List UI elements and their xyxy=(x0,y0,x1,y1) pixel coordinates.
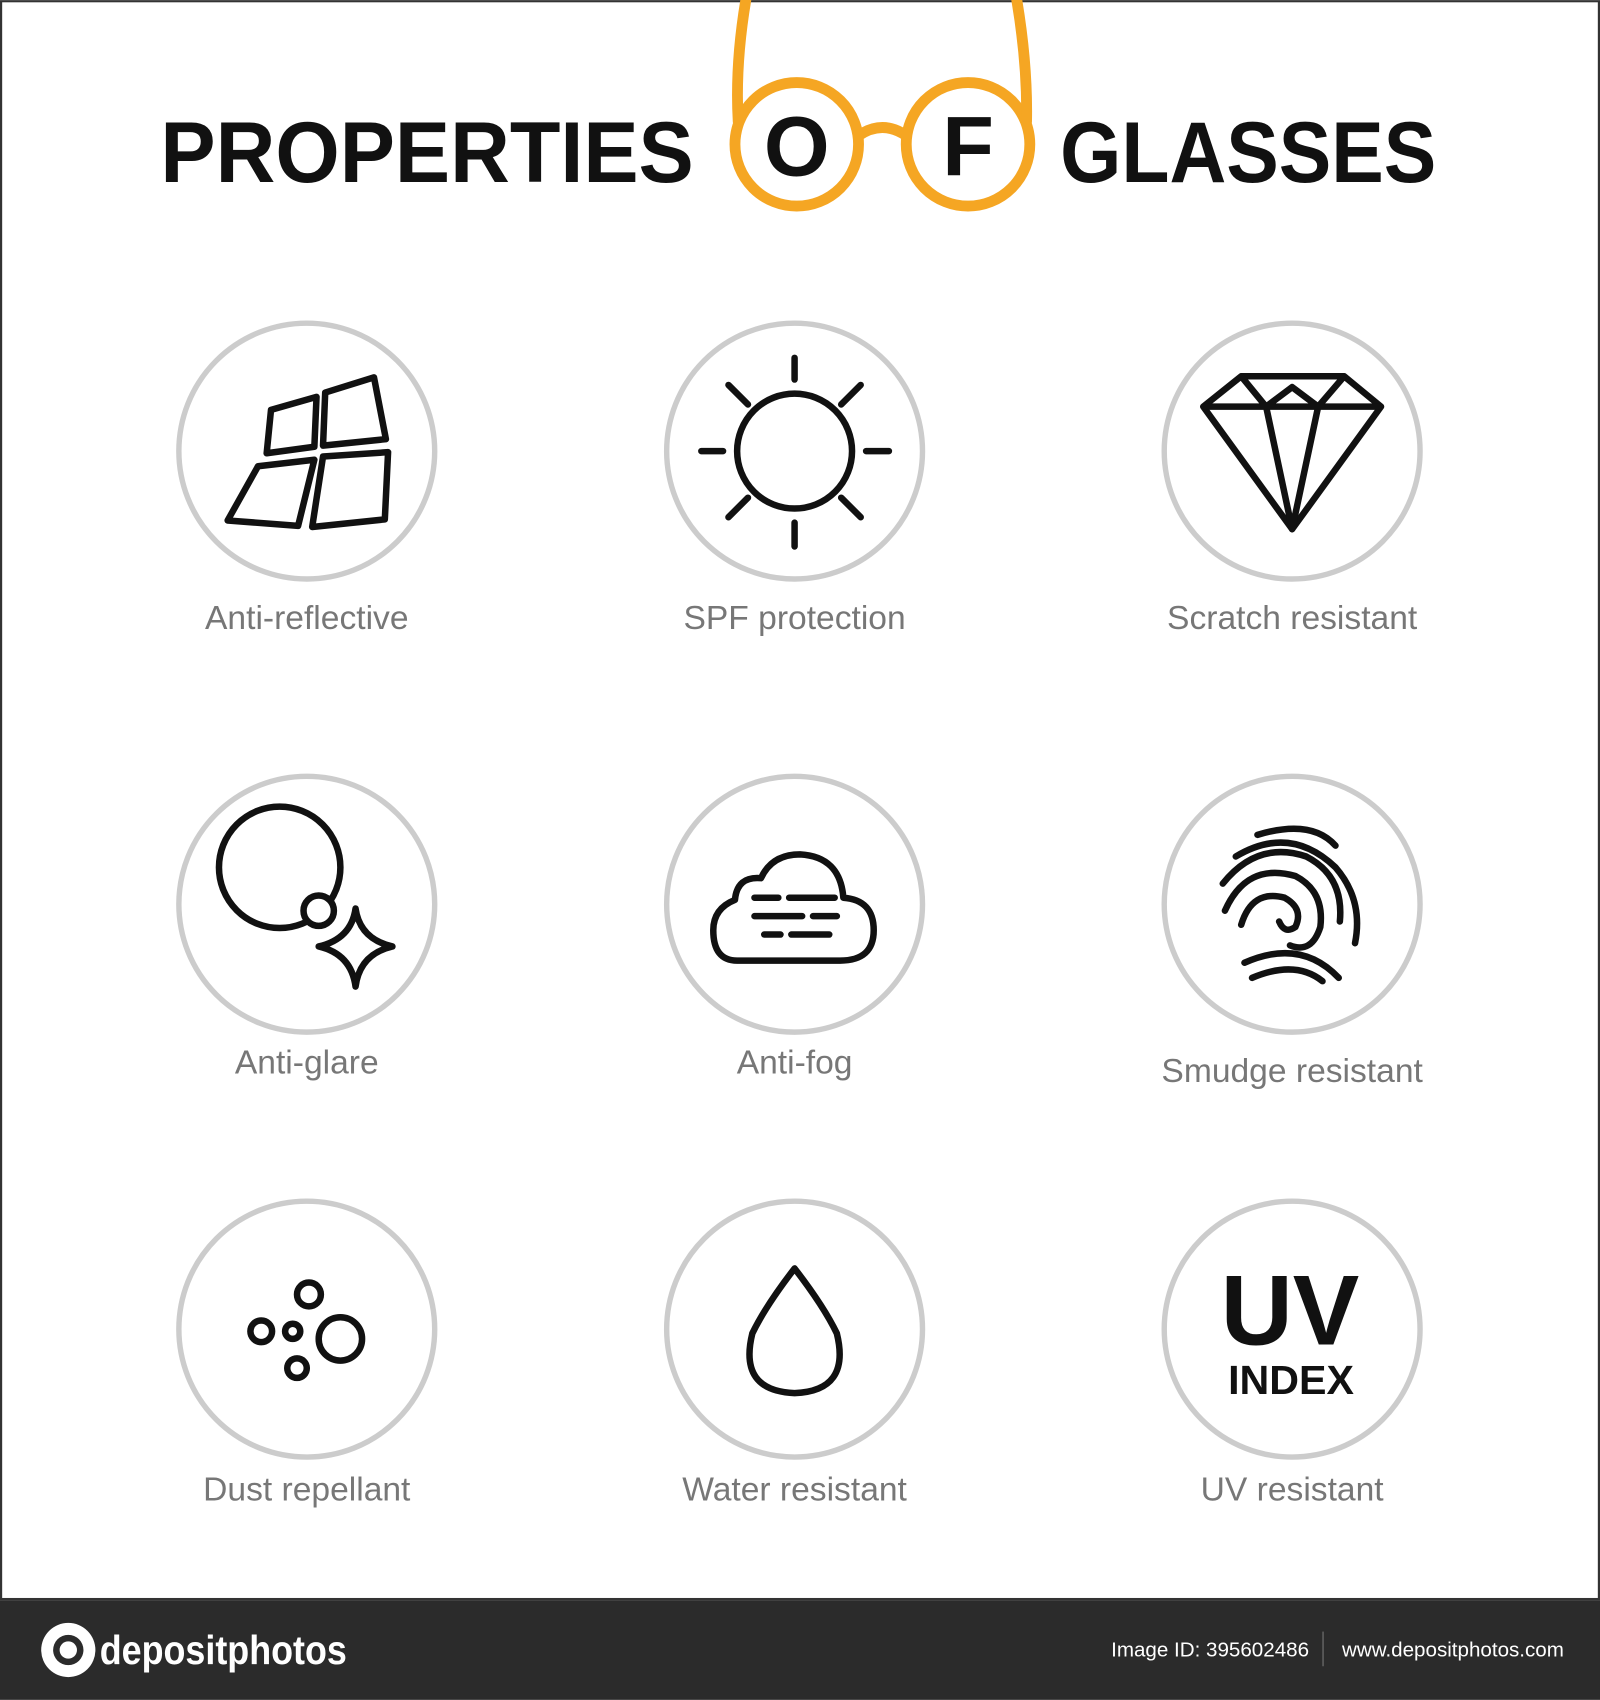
footer: depositphotos xyxy=(100,1627,347,1673)
panel: anti-reflective xyxy=(179,323,435,637)
panel: scratch resistant: Scratch resistant xyxy=(1167,600,1418,637)
panel: smudge resistant: Smudge resistant xyxy=(1161,1053,1424,1090)
panel: anti-glare: Anti-glare xyxy=(235,1044,379,1081)
panel: smudge resistant xyxy=(1161,776,1424,1090)
panel: UV resistant: UV resistant xyxy=(1201,1471,1384,1508)
title: O xyxy=(764,99,830,194)
panel: anti-reflective: Anti-reflective xyxy=(205,600,409,637)
panel: dust repellant: Dust repellant xyxy=(203,1471,411,1508)
panel: UV resistant: UV xyxy=(1221,1255,1359,1366)
panel: anti-fog: Anti-fog xyxy=(737,1044,852,1081)
icon: depositphotos logo xyxy=(41,1623,95,1677)
title xyxy=(160,0,1436,206)
footer: Image ID: 395602486 xyxy=(1111,1639,1309,1662)
panel: water resistant: Water resistant xyxy=(682,1471,908,1508)
footer: www.depositphotos.com xyxy=(1341,1639,1564,1662)
title: PROPERTIES xyxy=(160,104,694,201)
panel: UV resistant xyxy=(1164,1201,1420,1508)
panel: anti-fog xyxy=(667,776,922,1081)
title: F xyxy=(942,99,994,194)
icon: glasses xyxy=(735,0,1030,206)
panel: SPF protection: SPF protection xyxy=(683,600,906,637)
panel: SPF protection xyxy=(667,323,922,637)
panel: dust repellant xyxy=(179,1201,435,1508)
footer xyxy=(0,1600,1600,1700)
title: GLASSES xyxy=(1060,104,1436,201)
panel: anti-glare xyxy=(179,776,435,1081)
panel: water resistant xyxy=(667,1201,922,1508)
panel: UV resistant: INDEX xyxy=(1228,1357,1355,1403)
panel: scratch resistant xyxy=(1164,323,1420,637)
